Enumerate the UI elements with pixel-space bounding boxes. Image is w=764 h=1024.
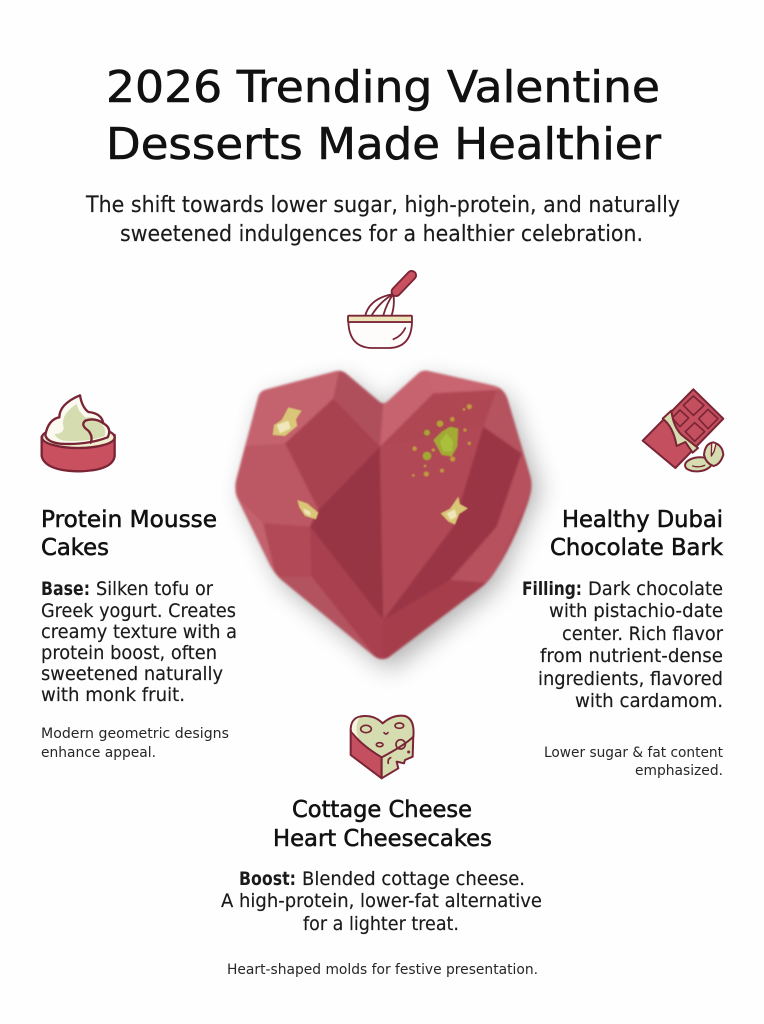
text block: protein mousse description: creamy texture with a — [41, 621, 237, 643]
title — [106, 62, 662, 170]
text block: protein mousse description — [41, 578, 237, 706]
text block: protein mousse description: Base: — [41, 578, 90, 600]
text block: cheesecake description — [221, 868, 542, 935]
subtitle: sweetened indulgences for a healthier celebration. — [120, 221, 643, 247]
note: geometric designs: Modern geometric designs — [41, 726, 229, 742]
text block: cheesecake description: Boost: — [239, 868, 296, 890]
heart dessert photo — [220, 350, 550, 680]
text block: protein mousse description: protein boost, often — [41, 642, 217, 664]
note: geometric designs: enhance appeal. — [41, 745, 156, 761]
heading: Protein Mousse Cakes: Cakes — [41, 535, 109, 561]
note: lower sugar and fat — [544, 745, 723, 779]
text block: chocolate bark description: with cardamom. — [575, 690, 723, 712]
text block: chocolate bark description: center. Rich flavor — [562, 623, 723, 645]
note: lower sugar and fat: Lower sugar & fat content — [544, 745, 723, 761]
heading: Healthy Dubai Chocolate Bark — [550, 507, 724, 561]
heading: Cottage Cheese Heart Cheesecakes: Cottage Cheese — [292, 797, 472, 823]
text block: protein mousse description: with monk fruit. — [41, 684, 185, 706]
title: 2026 Trending Valentine — [106, 62, 660, 113]
text block: cheesecake description: Blended cottage cheese. — [302, 868, 525, 890]
heading: Healthy Dubai Chocolate Bark: Healthy Dubai — [562, 507, 723, 533]
text block: chocolate bark description: Filling: — [522, 578, 582, 600]
icon: whisk and bowl — [348, 275, 412, 348]
subtitle — [85, 192, 680, 247]
text block: chocolate bark description: Dark chocolate — [588, 578, 723, 600]
note: heart-shaped molds: Heart-shaped molds for festive presentation. — [227, 962, 538, 978]
text block: protein mousse description: Silken tofu or — [96, 578, 213, 600]
icon: mousse cake — [42, 395, 115, 471]
subtitle: The shift towards lower sugar, high-protein, and naturally — [85, 192, 680, 218]
heart shadow — [243, 380, 540, 670]
text block: chocolate bark description: with pistachio-date — [549, 600, 723, 622]
pistachio dust — [412, 404, 472, 477]
text block: chocolate bark description — [522, 578, 723, 712]
text block: protein mousse description: Greek yogurt. Creates — [41, 600, 236, 622]
text block: protein mousse description: sweetened naturally — [41, 663, 223, 685]
gold leaf flakes — [273, 407, 468, 525]
heart facets — [234, 369, 533, 660]
heading: Healthy Dubai Chocolate Bark: Chocolate Bark — [550, 535, 724, 561]
title: Desserts Made Healthier — [106, 119, 662, 170]
text block: chocolate bark description: ingredients, flavored — [538, 668, 723, 690]
icon: chocolate bar with pistachios — [643, 389, 723, 473]
text block: cheesecake description: A high-protein, lower-fat alternative — [221, 890, 542, 912]
icon: heart cheesecake — [351, 716, 414, 778]
note: geometric designs — [41, 726, 229, 761]
heading: Protein Mousse Cakes — [41, 507, 217, 561]
heading: Cottage Cheese Heart Cheesecakes — [273, 797, 492, 852]
text block: cheesecake description: for a lighter treat. — [303, 913, 459, 935]
note: lower sugar and fat: emphasized. — [635, 763, 723, 779]
heading: Protein Mousse Cakes: Protein Mousse — [41, 507, 217, 533]
heading: Cottage Cheese Heart Cheesecakes: Heart Cheesecakes — [273, 826, 492, 852]
text block: chocolate bark description: from nutrient-dense — [540, 645, 723, 667]
